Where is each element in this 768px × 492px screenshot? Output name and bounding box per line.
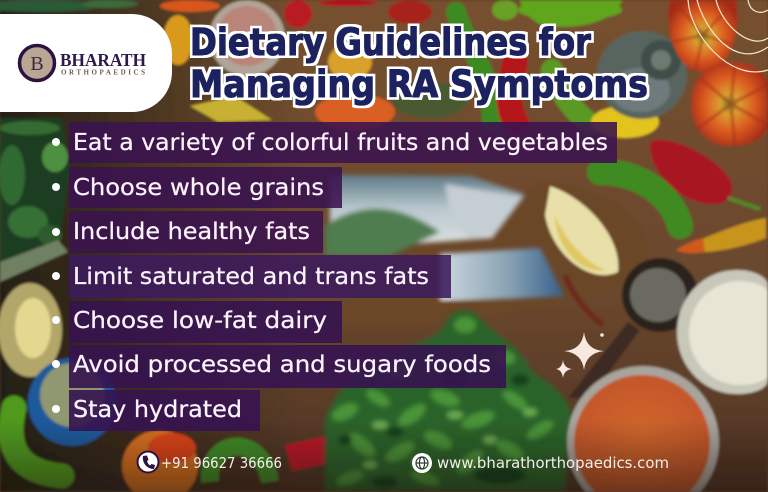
title: Dietary Guidelines for [190, 21, 592, 64]
item 2 [52, 167, 342, 208]
guideline list [52, 122, 617, 431]
item 1: Eat a variety of colorful fruits and vegetables [73, 128, 608, 156]
oil bottle / grey dish [597, 31, 687, 119]
chilli [565, 275, 603, 325]
item 3 [52, 211, 323, 253]
icon: sparkles [556, 332, 604, 378]
item 4 [52, 255, 451, 298]
logo wordmark: BHARATH [60, 50, 146, 70]
lemon wedge [545, 186, 618, 275]
item 3: Include healthy fats [73, 217, 310, 245]
logo wordmark: ORTHOPAEDICS [61, 68, 145, 76]
rice bowl [677, 270, 768, 394]
item 1 [52, 122, 617, 163]
decorative contour lines [688, 0, 768, 72]
fish [325, 175, 564, 302]
lemon left [0, 283, 62, 377]
tomatoes right [668, 0, 738, 72]
peppers middle top [456, 12, 492, 122]
red pepper bottom [284, 435, 328, 472]
green pepper bottom [210, 447, 270, 482]
logo emblem [20, 46, 54, 80]
item 2: Choose whole grains [73, 173, 324, 201]
item 5 [52, 301, 342, 343]
tomato bottom [122, 430, 198, 492]
item 7: Stay hydrated [73, 395, 242, 423]
cutting board [330, 182, 649, 326]
lentil bowl [567, 366, 719, 492]
green pepper bottom left [11, 408, 62, 476]
parsley [325, 310, 572, 491]
red pepper right [650, 140, 732, 204]
phone contact [138, 452, 282, 472]
logo emblem: B [30, 53, 44, 75]
phone contact: +91 96627 36666 [161, 454, 282, 472]
icon: globe [412, 453, 432, 473]
logo panel [0, 14, 172, 112]
title: Managing RA Symptoms [190, 63, 648, 106]
greens at left [0, 0, 138, 282]
blue bowl [28, 358, 116, 446]
item 6 [52, 345, 506, 388]
item 6: Avoid processed and sugary foods [73, 350, 491, 378]
title [190, 21, 648, 106]
item 4: Limit saturated and trans fats [73, 262, 429, 290]
item 5: Choose low-fat dairy [73, 306, 327, 334]
green pepper middle right [600, 172, 680, 226]
top items [160, 0, 220, 12]
icon: phone [138, 452, 158, 472]
yellow pepper [702, 216, 768, 254]
item 7 [52, 390, 260, 431]
website contact: www.bharathorthopaedics.com [437, 454, 669, 472]
spoon of spices [622, 258, 698, 332]
